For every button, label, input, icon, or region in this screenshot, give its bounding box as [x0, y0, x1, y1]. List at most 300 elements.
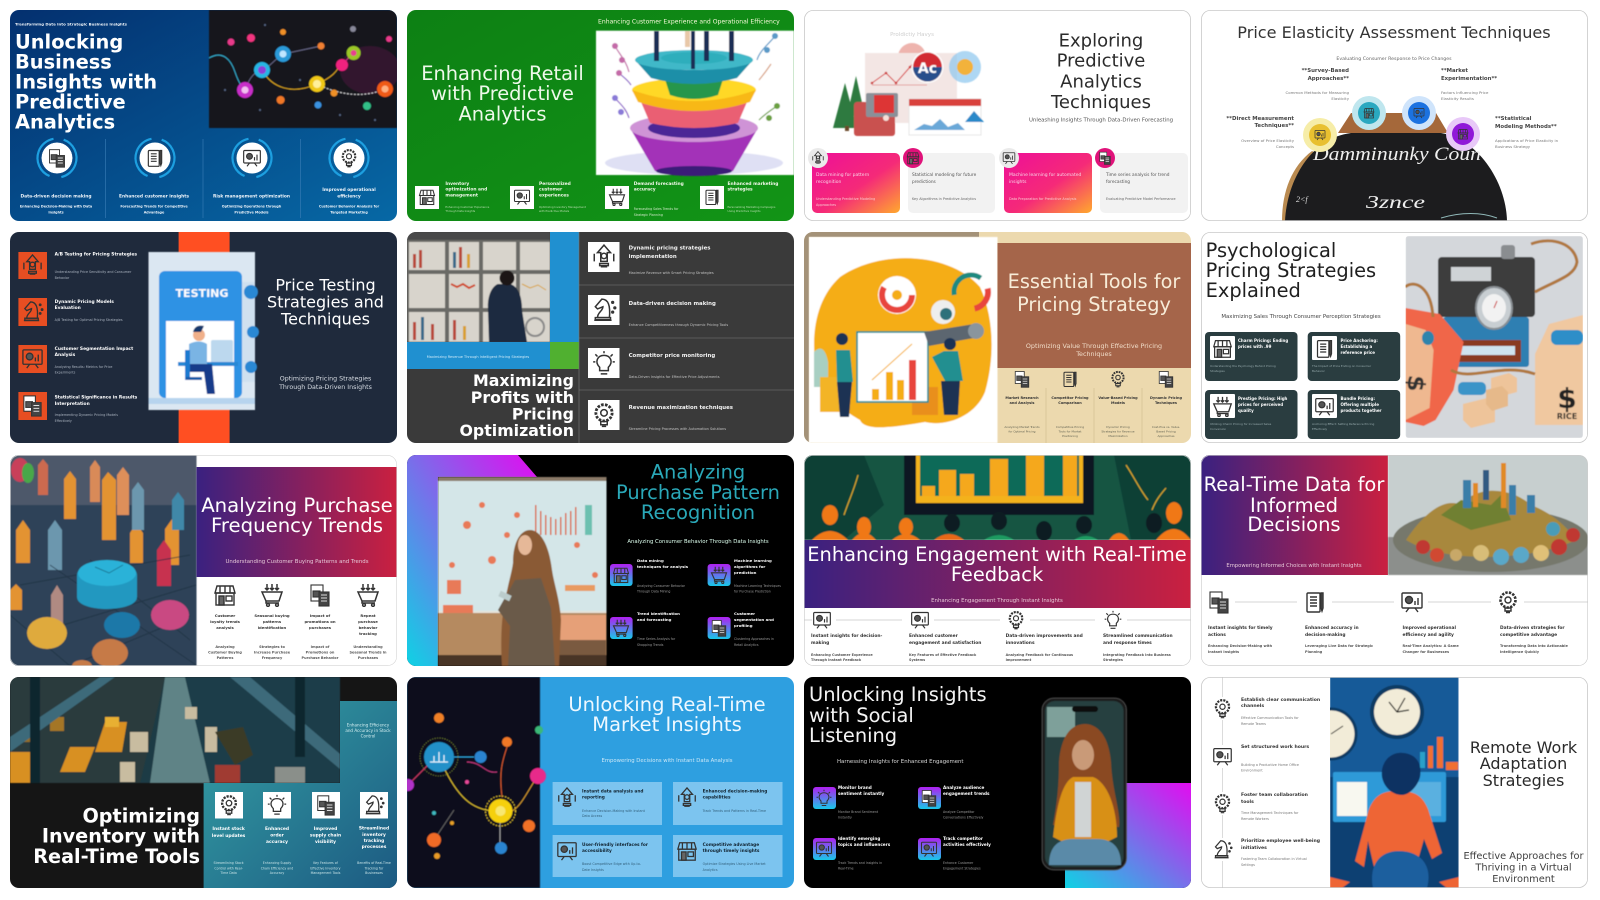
- title: Strategies and: [267, 293, 384, 312]
- blackboard: 2<f: [1296, 195, 1309, 204]
- column text: [212, 826, 391, 875]
- slide: Exploring Predictive Analytics: [804, 10, 1191, 221]
- item text: Customer: [734, 611, 755, 616]
- column text: Systems: [909, 658, 925, 662]
- card text: Anchoring Effect: Setting Reference Pricing: [1312, 422, 1374, 426]
- item text: Dynamic pricing strategies: [629, 246, 710, 252]
- column text: Promotions on: [306, 650, 335, 654]
- image: 3D data landscape: [1388, 455, 1589, 575]
- column text: Chain Efficiency and: [261, 866, 293, 870]
- image: data network: [209, 10, 400, 128]
- column text: Market Research: [1005, 396, 1039, 400]
- subtitle: Enhancing Customer Experience and Operational Efficiency: [598, 19, 780, 26]
- column text: Enhanced accuracy in: [1305, 625, 1359, 631]
- column text: Seasonal buying: [254, 613, 290, 618]
- column text: Improved: [314, 826, 337, 832]
- column text: competitive advantage: [1500, 632, 1557, 638]
- item text: Understanding Price Sensitivity and Consumer: [55, 270, 132, 274]
- teal panels: [204, 701, 397, 888]
- labels: [1226, 68, 1559, 149]
- column text: Instant insights for decision-: [811, 633, 883, 639]
- column text: Streamlining Stock: [214, 861, 244, 865]
- title: Unlocking Insights: [809, 683, 987, 706]
- item text: Enhance Customer: [943, 861, 974, 865]
- slide: Real-Time Market Insights: [407, 677, 794, 888]
- card text: Analytics: [703, 868, 718, 872]
- column text: Purchase Behavior: [302, 656, 339, 660]
- slide: Exploring Predictive Analytics: Key Algorithms in Predictive Analytics: [912, 197, 976, 201]
- slide: Purchase Pattern Recognition: [407, 455, 794, 666]
- item icons: [415, 186, 724, 209]
- item text: Analyze audience: [943, 785, 984, 790]
- card text: Statistical modeling for future: [912, 172, 977, 178]
- card text: Data Access: [582, 814, 602, 818]
- labels: Concepts: [1276, 144, 1294, 149]
- subtitle: Through Data-Driven Insights: [278, 384, 372, 391]
- card text: Time series analysis for trend: [1105, 172, 1170, 178]
- column text: Through Instant Feedback: [811, 658, 862, 662]
- column text: Time Data: [219, 871, 237, 875]
- card text: reference price: [1340, 350, 1375, 355]
- image: camera and price tags: RICE: [1557, 412, 1577, 421]
- faint image caption: Proldictiy Havys: [890, 32, 934, 38]
- column text: Instant stock: [212, 826, 245, 832]
- column text: efficiency: [337, 193, 361, 199]
- title: Techniques: [280, 310, 370, 329]
- column text: Enhanced: [265, 826, 289, 832]
- item text: Effectively: [55, 419, 72, 423]
- cards: [1205, 332, 1400, 439]
- side caption: and Accuracy in Stock: [345, 728, 391, 733]
- column text: Analyzing Feedback for Continuous: [1006, 653, 1073, 657]
- item text: Real-Time: [838, 866, 854, 870]
- title: Informed: [1250, 494, 1338, 517]
- column text: and response times: [1103, 640, 1152, 646]
- item text: topics and influencers: [838, 842, 891, 847]
- column text: Strategies to: [259, 645, 285, 649]
- title: Price Elasticity Assessment Techniques: [1237, 23, 1551, 42]
- item text: Settings: [1241, 863, 1255, 867]
- item icons: [610, 564, 731, 639]
- image: camera and price tags: $: [1401, 374, 1431, 393]
- blackboard: 3znce: [1365, 192, 1425, 212]
- column text: Management Tools: [311, 871, 341, 875]
- column text: Key Features of Effective Feedback: [909, 653, 977, 657]
- title: Enhancing Engagement with Real-Time: [807, 543, 1187, 566]
- column text: level updates: [212, 833, 246, 839]
- column text: Insights: [48, 210, 64, 214]
- card text: predictions: [912, 179, 937, 185]
- subtitle: Environment: [1492, 874, 1555, 885]
- card text: recognition: [816, 179, 841, 185]
- title: Techniques: [1050, 92, 1151, 113]
- item text: Track competitor: [943, 836, 984, 841]
- badges: [1303, 96, 1480, 152]
- caption band: Maximizing Revenue Through Intelligent Pricing Strategies: [427, 355, 529, 359]
- timeline: [1210, 592, 1588, 613]
- column text: Enhancing Decision-Making with: [1208, 644, 1273, 648]
- column text: and Analysis: [1010, 401, 1034, 405]
- column text: patterns: [263, 619, 282, 624]
- item text: Retail Analytics: [734, 643, 759, 647]
- item text: Data-Driven Insights for Effective Price Adjustments: [629, 375, 720, 379]
- column text: Instant Insights: [1208, 650, 1239, 654]
- labels: **Direct Measurement: [1226, 116, 1294, 122]
- item text: Track Trends and Insights in: [837, 861, 882, 865]
- column text: visibility: [315, 839, 336, 845]
- column text: Analyzing: [215, 645, 235, 649]
- item text: A/B Testing for Pricing Strategies: [55, 252, 137, 258]
- item text: Identify emerging: [838, 836, 880, 841]
- title: Maximizing: [473, 371, 574, 390]
- item text: Revenue maximization techniques: [629, 405, 733, 411]
- title: Remote Work: [1470, 738, 1578, 757]
- card text: prices with .99: [1238, 344, 1272, 349]
- item text: Conversations Effectively: [943, 816, 984, 820]
- card text: accessibility: [582, 848, 612, 854]
- item text: Customer Segmentation Impact: [55, 346, 133, 352]
- item text: customer: [539, 187, 563, 193]
- item text: Set structured work hours: [1241, 744, 1309, 750]
- column text: tracking: [364, 838, 384, 844]
- column text: Predictive Models: [234, 210, 269, 214]
- item text: channels: [1241, 703, 1264, 709]
- column text: Data-driven improvements and: [1006, 633, 1083, 639]
- subtitle: Evaluating Consumer Response to Price Changes: [1336, 56, 1452, 62]
- column text: Seasonal Trends in: [349, 650, 387, 654]
- column text: purchases: [309, 625, 332, 630]
- item text: Personalized: [539, 181, 571, 187]
- slide: Price Testing Strategies: [10, 232, 397, 443]
- slide: Real-Time Feedback: [804, 455, 1191, 666]
- column text: decision-making: [1305, 632, 1346, 638]
- column text: supply chain: [310, 832, 341, 838]
- card icons: [1210, 336, 1337, 418]
- column text: Planning: [1305, 650, 1323, 654]
- title: Business: [15, 51, 112, 74]
- cards: [553, 782, 782, 877]
- item icons: [813, 787, 941, 860]
- item text: Analyzing Results: Metrics for Price: [55, 365, 112, 369]
- column text: Positioning: [1062, 434, 1078, 438]
- column text: Improved operational: [1402, 625, 1457, 631]
- image: remote worker at desk: [1330, 678, 1459, 888]
- column text: behavior: [359, 625, 378, 630]
- column text: Accuracy: [270, 871, 284, 875]
- labels: Modeling Methods**: [1495, 124, 1557, 130]
- column text: Value-Based Pricing: [1098, 396, 1138, 400]
- column text: Leveraging Live Data for Strategic: [1305, 644, 1373, 648]
- item text: Behavior: [55, 276, 70, 280]
- column text: identification: [258, 625, 287, 630]
- column text: [811, 633, 1173, 662]
- column text: innovations: [1006, 640, 1035, 646]
- labels: Approaches**: [1308, 76, 1349, 82]
- column text: Improvement: [1006, 658, 1032, 662]
- item text: [636, 558, 781, 647]
- item text: Shopping Trends: [637, 643, 664, 647]
- item text: [55, 252, 138, 423]
- column text: Key Features of: [313, 861, 339, 865]
- column text: Control with Real-: [214, 866, 243, 870]
- title: Real-Time Tools: [33, 845, 200, 868]
- item text: Statistical Significance in Results: [55, 395, 138, 401]
- item text: with Predictive Models: [539, 209, 570, 213]
- subtitle: Optimizing Pricing Strategies: [280, 376, 371, 383]
- column text: Patterns: [217, 656, 233, 660]
- title: Essential Tools for: [1008, 270, 1180, 293]
- column text: [1004, 396, 1182, 438]
- illustration: analytics dashboard: [833, 43, 984, 136]
- title: Adaptation: [1480, 754, 1567, 773]
- item text: Enhance Competitiveness through Dynamic Pricing Tools: [629, 323, 728, 327]
- item text: implementation: [629, 254, 677, 260]
- card icons: [558, 788, 696, 860]
- labels: Overview of Price Elasticity: [1241, 138, 1295, 143]
- side caption: Control: [361, 734, 375, 738]
- image: shopper at data display: [438, 477, 606, 666]
- blackboard: Damminunky Coun: [1312, 144, 1481, 165]
- item text: Machine learning: [734, 558, 772, 563]
- item text: segmentation and: [734, 617, 774, 622]
- column text: Repeat: [360, 613, 376, 618]
- column text: [20, 187, 379, 214]
- title: Enhancing Retail: [421, 62, 584, 85]
- icons and columns: [1015, 372, 1173, 443]
- column text: Customer: [215, 613, 235, 618]
- title: Listening: [809, 724, 897, 747]
- column text: Increase Purchase: [254, 650, 291, 654]
- slide: Maximizing Profits: [407, 232, 794, 443]
- labels: Experimentation**: [1441, 76, 1497, 82]
- item text: Analyze Competitor: [943, 810, 975, 814]
- labels: Common Methods for Measuring: [1286, 90, 1350, 95]
- gradient header: [804, 540, 1191, 608]
- subtitle: Unleashing Insights Through Data-Driven Forecasting: [1029, 118, 1173, 124]
- card text: Conversion: [1210, 427, 1226, 431]
- card text: Prestige Pricing: High: [1238, 396, 1288, 401]
- item text: Experiments: [55, 371, 76, 375]
- item text: Time Management Techniques for: [1240, 811, 1299, 815]
- item text: Personalizing Marketing Campaigns: [728, 205, 776, 209]
- title: Analytics: [15, 111, 115, 134]
- column text: Approaches: [1157, 434, 1175, 438]
- column text: Customer Behavior Analysis for: [319, 204, 379, 208]
- card text: Enhanced decision-making: [703, 788, 767, 794]
- card text: Date Insights: [582, 868, 604, 872]
- item text: Time Series Analysis for: [636, 637, 676, 641]
- item text: sentiment instantly: [838, 791, 885, 796]
- subtitle: Enhancing Engagement Through Instant Insights: [931, 598, 1063, 604]
- title: Pricing Strategies: [1206, 259, 1376, 282]
- illustration: strategists and charts: [809, 237, 998, 443]
- column text: analysis: [216, 625, 234, 630]
- column text: Cost-Plus vs. Value-: [1152, 425, 1180, 429]
- item text: Clustering Approaches in: [734, 637, 774, 641]
- column text: Streamlined communication: [1103, 633, 1173, 639]
- item text: Evaluation: [55, 305, 81, 311]
- column text: Models: [1111, 401, 1125, 405]
- title: Predictive: [1057, 51, 1145, 72]
- title: Predictive: [15, 91, 126, 114]
- subtitle: Analyzing Consumer Behavior Through Data Insights: [627, 539, 769, 545]
- image: layered funnel: [596, 31, 794, 176]
- image: testing illustration: [148, 252, 259, 410]
- column text: Techniques: [1155, 401, 1177, 405]
- card text: Data mining for pattern: [816, 172, 869, 178]
- column text: Transforming Data into Actionable: [1500, 644, 1569, 648]
- title: Frequency Trends: [211, 514, 383, 537]
- column text: actions: [1208, 632, 1226, 638]
- brown header panel: [998, 243, 1191, 368]
- item text: Streamline Pricing Processes with Automation Solutions: [629, 427, 726, 431]
- item text: Environment: [1241, 768, 1263, 772]
- card text: forecasting: [1106, 179, 1130, 185]
- column text: accuracy: [266, 839, 288, 845]
- slide: Exploring Predictive Analytics: Evaluating Predictive Model Performance: [1106, 197, 1176, 201]
- item text: Enhanced marketing: [728, 181, 778, 187]
- subtitle: Maximizing Sales Through Consumer Perception Strategies: [1221, 314, 1381, 320]
- item text: A/B Testing for Optimal Pricing Strategies: [55, 318, 123, 322]
- column text: processes: [362, 844, 387, 850]
- column text: Comparison: [1058, 401, 1082, 405]
- item text: Demand forecasting: [634, 181, 684, 187]
- item text: engagement trends: [943, 791, 990, 796]
- gradient header: [1201, 455, 1388, 575]
- item text: accuracy: [634, 187, 656, 193]
- labels: Techniques**: [1254, 123, 1294, 129]
- labels: **Survey-Based: [1302, 68, 1349, 74]
- title: Recognition: [641, 501, 755, 524]
- column text: Impact of: [310, 613, 330, 618]
- card text: Charm Pricing: Ending: [1238, 338, 1288, 343]
- item text: Trend identification: [637, 611, 680, 616]
- card text: capabilities: [703, 794, 731, 800]
- subtitle: Effective Approaches for: [1463, 851, 1585, 862]
- column text: Effective Inventory: [310, 866, 341, 870]
- side caption: Enhancing Efficiency: [347, 723, 390, 728]
- labels: Elasticity Results: [1441, 96, 1474, 101]
- item text: Remote Teams: [1241, 722, 1266, 726]
- title: with Predictive: [431, 82, 574, 105]
- title: Real-Time Data for: [1204, 473, 1385, 496]
- title: Optimization: [460, 421, 574, 440]
- image: pegs and tokens: [10, 455, 196, 672]
- image: warehouse: [10, 677, 340, 783]
- item text: management: [445, 192, 478, 198]
- column text: order: [270, 832, 285, 838]
- subtitle: Empowering Decisions with Instant Data Analysis: [602, 758, 733, 764]
- card text: Behavior: [1312, 369, 1326, 373]
- title: Insights with: [15, 71, 157, 94]
- icon row: [32, 133, 374, 218]
- item text: Forecasting Sales Trends for: [634, 207, 679, 211]
- item text: optimization and: [445, 187, 487, 193]
- column text: Tools for Market: [1058, 430, 1082, 434]
- column text: Competitive Pricing: [1056, 425, 1084, 429]
- item text: Competitor price monitoring: [629, 353, 715, 359]
- title: Unlocking Real-Time: [568, 693, 766, 716]
- card text: prices for perceived: [1238, 402, 1283, 407]
- column text: Data-driven strategies for: [1500, 625, 1565, 631]
- column text: Streamlined: [359, 826, 389, 832]
- item text: for Purchase Prediction: [734, 590, 771, 594]
- icons: [215, 584, 378, 606]
- slide: Unlocking Business Insights: [10, 10, 397, 221]
- item text: tools: [1241, 799, 1254, 805]
- item text: [1240, 697, 1320, 867]
- item text: Through Data Mining: [636, 590, 670, 594]
- card text: Boost Competitive Edge with Up-to-: [582, 862, 642, 866]
- title: Pricing: [512, 405, 574, 424]
- item text: Data mining: [637, 558, 664, 563]
- column text: Instant insights for timely: [1208, 625, 1273, 631]
- column text: Enhancing Decision-Making with Data: [20, 204, 93, 208]
- item text: Foster team collaboration: [1241, 792, 1308, 798]
- slide: Remote Work: [1201, 677, 1588, 888]
- column text: Based Pricing: [1156, 430, 1176, 434]
- column text: inventory: [362, 832, 386, 838]
- item text: experiences: [539, 192, 569, 198]
- item text: Engagement Strategies: [943, 866, 981, 870]
- item text: Analysis: [55, 352, 76, 358]
- item text: Data-driven decision making: [629, 301, 716, 307]
- item text: Remote Workers: [1241, 817, 1269, 821]
- labels: Elasticity: [1331, 96, 1350, 101]
- icons: [1211, 697, 1234, 861]
- image: testing illustration: TESTING: [176, 288, 228, 300]
- column text: purchase: [358, 619, 378, 624]
- column text: Analyzing Market Trends: [1004, 425, 1040, 429]
- item text: Using Predictive Insights: [728, 209, 761, 213]
- title: Pricing Strategy: [1017, 293, 1171, 316]
- item text: Inventory: [445, 181, 469, 187]
- column text: Intelligence Quickly: [1500, 650, 1540, 654]
- labels: **Market: [1441, 68, 1468, 74]
- phone with portrait: [1042, 698, 1126, 870]
- item text: activities effectively: [943, 842, 991, 847]
- slide: Optimizing Inventory: [10, 677, 397, 888]
- labels: Factors Influencing Price: [1441, 90, 1489, 95]
- column text: Impact of: [311, 645, 330, 649]
- card text: quality: [1238, 408, 1254, 413]
- card text: [816, 172, 1170, 185]
- kicker: Transforming Data into Strategic Business Insights: [15, 22, 128, 26]
- column text: tracking: [359, 631, 377, 636]
- slide: Real-Time Data: [1201, 455, 1588, 666]
- title: Decisions: [1247, 513, 1341, 536]
- card text: products together: [1340, 408, 1382, 413]
- column text: making: [811, 640, 829, 646]
- item text: [837, 785, 991, 870]
- title: Exploring: [1059, 31, 1143, 52]
- column text: Enhanced customer: [909, 633, 959, 639]
- item text: Interpretation: [55, 401, 90, 407]
- title: Strategies: [1483, 771, 1564, 790]
- column text: for Optimal Pricing: [1008, 430, 1036, 434]
- item text: Instantly: [838, 816, 852, 820]
- item text: Enhancing Customer Experience: [445, 205, 490, 209]
- column text: Changer for Businesses: [1402, 650, 1449, 654]
- subtitle: Thriving in a Virtual: [1474, 862, 1572, 874]
- item text: Monitor Brand Sentiment: [838, 810, 879, 814]
- column text: Enhancing Customer Experience: [811, 653, 873, 657]
- card text: Machine learning for automated: [1009, 172, 1081, 178]
- labels: Applications of Price Elasticity in: [1495, 138, 1559, 143]
- card text: Optimize Strategies Using Live Market: [703, 862, 766, 866]
- card text: insights: [1009, 179, 1027, 185]
- image: analyst at chart wall: [407, 232, 550, 342]
